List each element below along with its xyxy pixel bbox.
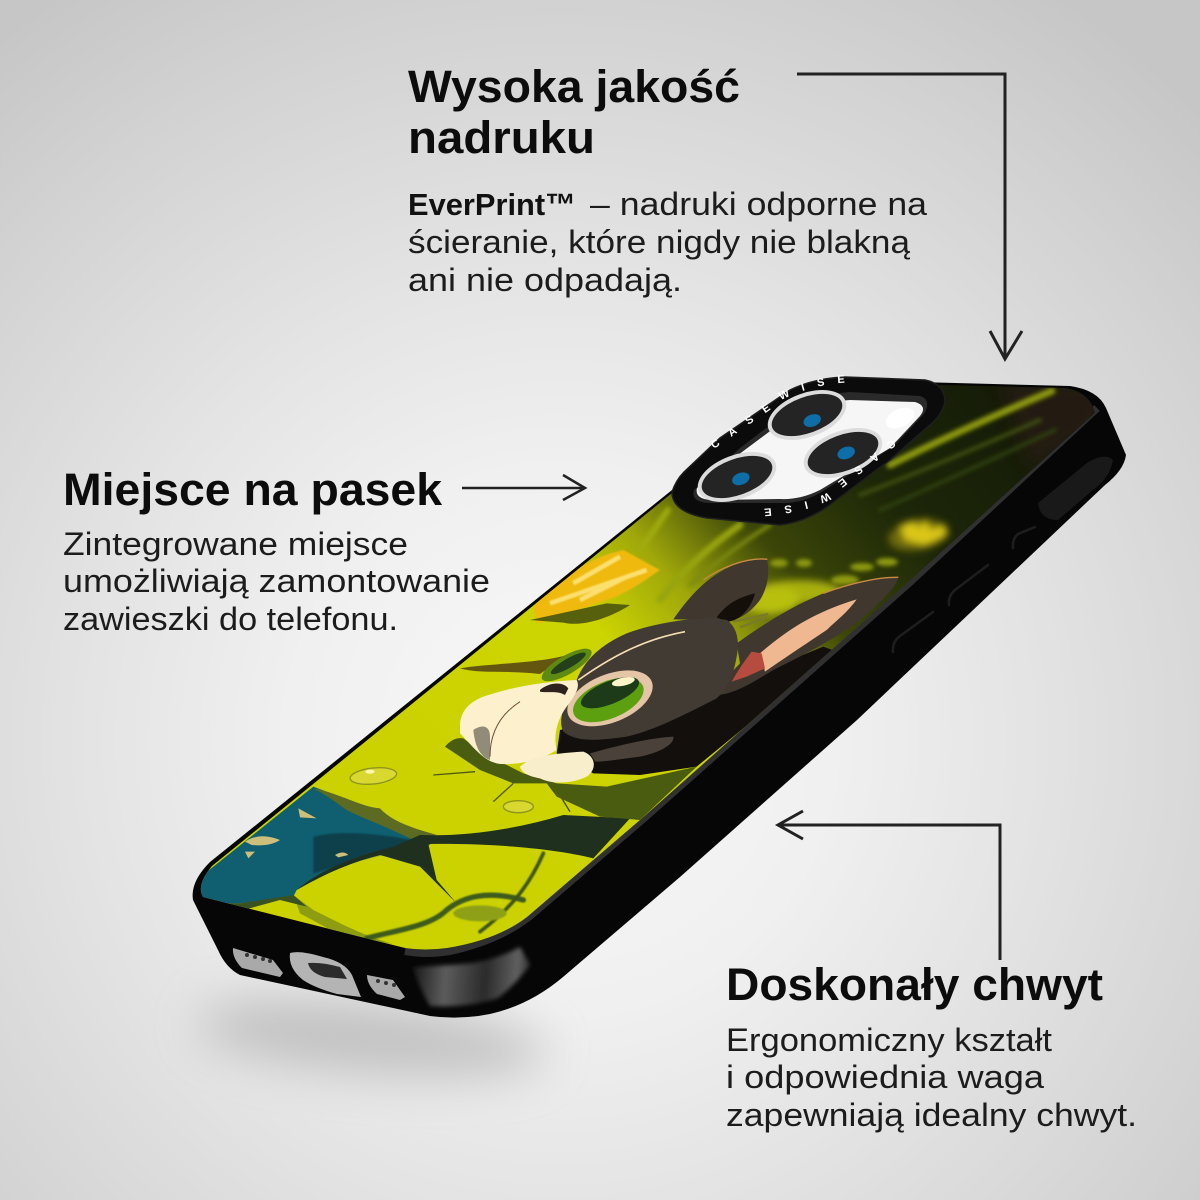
description: strap space (63, 526, 490, 637)
dog right ear (718, 577, 898, 695)
description: print quality: – nadruki odporne na (590, 186, 927, 222)
lower left wedge (293, 895, 393, 944)
text block: strap space (63, 464, 490, 637)
right ear rim (823, 577, 898, 593)
drop glint (365, 770, 375, 774)
lens left (691, 442, 783, 512)
dark top corner (1008, 387, 1094, 461)
heading: print quality (408, 61, 740, 163)
strap slot (1038, 457, 1113, 520)
branch on pad (460, 655, 567, 674)
ring lettering top: CASEWISE (712, 375, 844, 448)
big eye ring (559, 659, 661, 737)
grass streaks (640, 391, 1055, 600)
small eye (542, 648, 592, 682)
pink inner ear (760, 599, 857, 672)
small eye pupil (549, 649, 588, 677)
tick mark (433, 772, 513, 802)
mouth line (490, 702, 520, 757)
nose (540, 684, 568, 695)
description: print quality: ścieranie, które nigdy nie blakną (408, 224, 910, 260)
flash (883, 404, 917, 432)
arrow: strap space (462, 475, 585, 500)
case rim (405, 408, 1097, 953)
pad crease (561, 798, 570, 812)
flower shadow (530, 603, 630, 624)
description: print quality: EverPrint™ (408, 187, 576, 222)
eye highlight (611, 675, 636, 688)
ring inner shade (693, 392, 927, 503)
water lily flower (530, 550, 660, 624)
corner bumper highlight (413, 947, 530, 1006)
speaker holes (245, 953, 272, 963)
left speaker (233, 948, 283, 977)
lower scene of pads and water (193, 766, 630, 944)
dog shadow on pad (445, 738, 697, 820)
dog body (557, 647, 837, 775)
heading: grip: Doskonały chwyt (726, 959, 1103, 1010)
water (200, 786, 431, 904)
water highlights (245, 808, 348, 858)
camera ring (672, 377, 945, 525)
camera plate (697, 400, 923, 500)
charging port opening (308, 963, 347, 979)
lens top (761, 380, 853, 450)
case body (193, 380, 1126, 1018)
dog head (561, 619, 738, 740)
dog left ear (673, 559, 768, 620)
right speaker (367, 975, 405, 1000)
description: strap space: Zintegrowane miejsce (63, 526, 408, 562)
side buttons (893, 527, 1035, 652)
phone case (192, 375, 1126, 1018)
description: grip: zapewniają idealny chwyt. (726, 1097, 1137, 1133)
upper scene and dog (445, 550, 898, 820)
bottom left shadow (228, 895, 306, 908)
arrow: print quality (797, 74, 1022, 359)
camera island (671, 375, 946, 526)
heading: strap space: Miejsce na pasek (63, 464, 443, 515)
big eye pupil (577, 671, 643, 715)
description: strap space: umożliwiają zamontowanie (63, 563, 490, 599)
red ear base (732, 652, 765, 682)
arrow: grip (778, 811, 1000, 960)
dew drops (349, 766, 533, 813)
yellow bokeh blobs (740, 580, 842, 614)
big eye iris (567, 669, 650, 731)
muzzle (460, 680, 578, 764)
ring lettering bottom: CASEWISE (764, 441, 895, 516)
description: grip (726, 1022, 1137, 1133)
speaker holes right (376, 979, 396, 987)
french bulldog illustration (460, 559, 898, 783)
description: print quality (408, 186, 927, 298)
phone shadow (195, 987, 549, 1089)
collar bits (733, 614, 768, 627)
dog arm (590, 737, 673, 762)
lens right (797, 418, 889, 488)
muzzle shadow (473, 727, 490, 760)
text block: print quality (408, 61, 927, 298)
artwork on back (200, 385, 1095, 950)
bokeh spots (770, 558, 898, 585)
description: strap space: zawieszki do telefonu. (63, 601, 398, 637)
text block: grip (726, 959, 1137, 1133)
left ear rim (703, 559, 767, 580)
description: print quality: ani nie odpadają. (408, 262, 682, 298)
description: grip: i odpowiednia waga (726, 1059, 1044, 1095)
petal highlights (550, 557, 647, 603)
heading: print quality: Wysoka jakość (408, 61, 740, 112)
olive bank (313, 788, 437, 840)
charging port (290, 952, 361, 997)
forehead highlight (578, 632, 685, 680)
description: grip: Ergonomiczny kształt (726, 1022, 1052, 1058)
dark branch band (297, 815, 630, 903)
dog paw (520, 752, 594, 783)
inner left ear (717, 593, 755, 622)
out-of-focus reeds (367, 853, 543, 938)
heading: print quality: nadruku (408, 112, 595, 163)
blurred flower (886, 515, 950, 555)
water deep shade (313, 833, 420, 873)
